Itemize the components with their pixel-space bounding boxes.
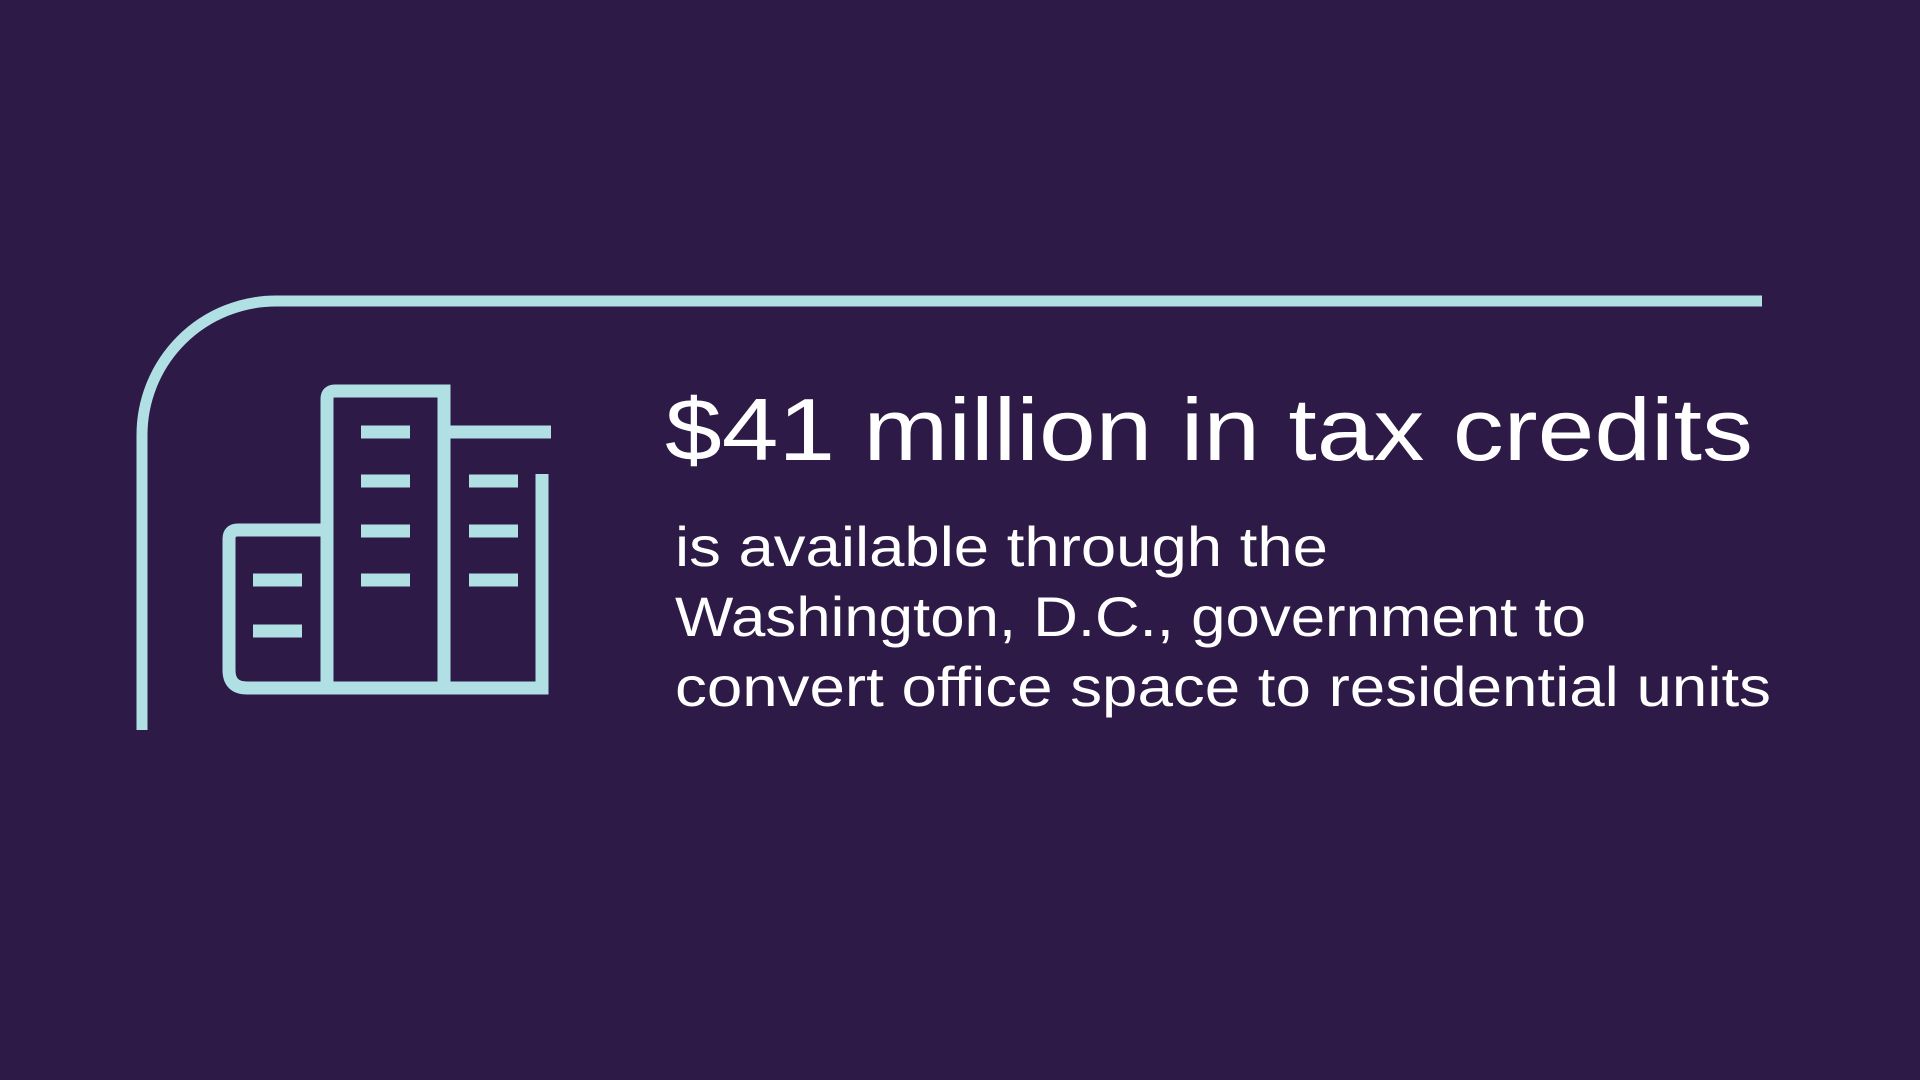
body text <box>675 515 1771 718</box>
icon: center tower <box>327 391 444 688</box>
icon: left building <box>229 530 327 688</box>
body text: convert office space to residential units <box>675 655 1771 718</box>
body text: Washington, D.C., government to <box>675 585 1586 648</box>
body text: is available through the <box>675 515 1328 578</box>
frame line <box>142 301 1762 730</box>
icon: buildings <box>229 391 551 688</box>
icon: right building <box>327 432 551 688</box>
headline: $41 million in tax credits <box>665 380 1753 479</box>
